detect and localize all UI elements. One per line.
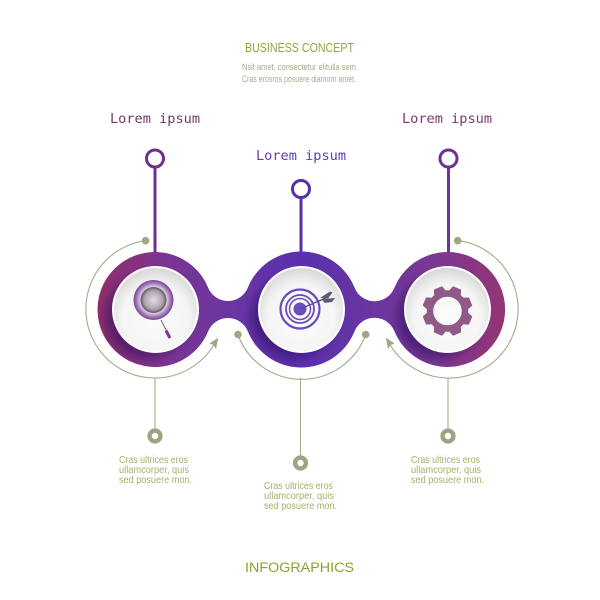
text block: right: sed posuere mon. [411,475,484,486]
subtitle text [242,62,358,84]
icon: gear [422,285,473,337]
text block: middle: Cras ultrices eros [264,481,333,492]
text block: middle: sed posuere mon. [264,501,337,512]
pin: middle [292,180,310,254]
text block: left: ullamcorper, quis [119,465,189,476]
band inner shadows [105,275,481,359]
arrow: middle arc [234,331,370,379]
pin: left [146,150,164,254]
pin: right [440,150,457,254]
text block: left: sed posuere mon. [119,475,192,486]
connected circles band [97,252,505,367]
subtitle text: Cras erosros posuere diamorn amet. [242,74,356,84]
icon: magnifier [134,280,174,338]
disc: left [112,266,199,353]
title: BUSINESS CONCEPT [245,40,354,55]
subtitle text: Nsit amet, consectetur elitulla sem. [242,62,358,72]
disc: middle [258,266,345,353]
text block: middle [264,481,337,512]
marker: middle [295,378,306,468]
text block: left [119,455,192,486]
text block: middle: ullamcorper, quis [264,491,334,502]
text block: left: Cras ultrices eros [119,455,188,466]
arrow: left arc [86,237,218,378]
footer title: INFOGRAPHICS [245,560,354,575]
heading: middle: Lorem ipsum [256,148,346,164]
text block: right: ullamcorper, quis [411,465,481,476]
heading: right: Lorem ipsum [402,111,492,127]
marker: right [443,378,453,441]
text block: right [411,455,484,486]
marker: left [150,378,160,441]
heading: left: Lorem ipsum [110,111,200,127]
icon: target with arrow [280,290,335,328]
arrow: right arc [386,237,518,378]
disc: right [404,266,491,353]
text block: right: Cras ultrices eros [411,455,480,466]
